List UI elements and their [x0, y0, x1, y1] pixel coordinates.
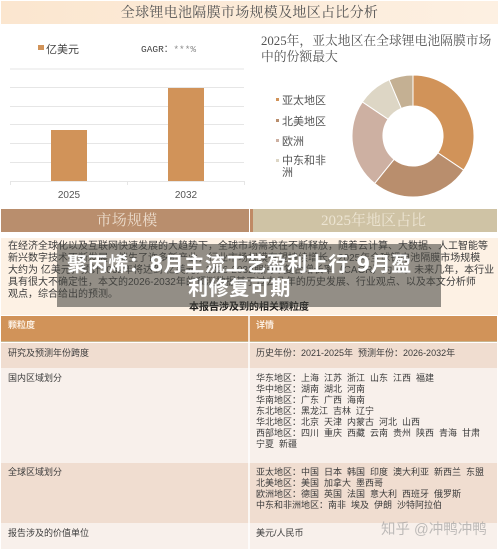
row: domestic regions: 华中地区：湖南 湖北 河南	[256, 384, 365, 394]
table header: 详情	[256, 320, 274, 330]
donut legend: 北美地区	[282, 116, 326, 128]
donut legend: 中东和非	[282, 155, 326, 167]
table header: 颗粒度	[8, 320, 35, 330]
donut legend: 洲	[282, 167, 293, 179]
row: global regions	[1, 463, 497, 523]
row: global regions: 亚太地区：中国 日本 韩国 印度 澳大利亚 新西兰 东盟	[256, 467, 484, 477]
bar chart: market size: 亿美元	[46, 43, 79, 56]
market size paragraph: 具有很大不确定性，本文的2026-2032年的预测数据基于过去几年的历史发展、行业观点、以及本文分析师	[8, 277, 476, 288]
table header	[1, 316, 497, 342]
donut heading: 2025年，亚太地区在全球锂电池隔膜市场	[261, 34, 491, 48]
bar chart: market size	[10, 43, 245, 201]
row: domestic regions: 华北地区：北京 天津 内蒙古 河北 山西	[256, 417, 420, 427]
news headline overlay: 聚丙烯：8月主流工艺盈利上行 9月盈	[67, 252, 412, 276]
watermark: 知乎 @冲鸭冲鸭	[381, 522, 487, 538]
news headline overlay: 利修复可期	[188, 276, 291, 300]
donut heading	[261, 34, 491, 64]
section header: market size: 市场规模	[96, 213, 158, 229]
row: domestic regions: 华东地区：上海 江苏 浙江 山东 江西 福建	[256, 373, 434, 383]
row: global regions: 全球区域划分	[8, 467, 62, 477]
bar chart: market size: GAGR：***%	[141, 44, 196, 55]
section header: 2025 regional share	[250, 209, 497, 232]
section header: market size	[1, 209, 253, 232]
section header: 2025 regional share: 2025年地区占比	[321, 213, 426, 229]
donut legend	[276, 94, 326, 179]
market size paragraph: 大约为 亿美元，预计2032年将达到 亿美元，2026-2032期间年复合增长率（CAGR）为 %。未来几年，本行业	[8, 265, 494, 276]
donut chart: regional share	[352, 76, 474, 196]
bar chart: market size: 2025	[58, 190, 81, 201]
donut legend: 亚太地区	[282, 95, 326, 107]
row: global regions: 欧洲地区：德国 英国 法国 意大利 西班牙 俄罗斯	[256, 489, 461, 499]
row: domestic regions: 国内区域划分	[8, 373, 62, 383]
row: domestic regions: 华南地区：广东 广西 海南	[256, 395, 365, 405]
row: value unit	[1, 523, 497, 549]
market size paragraph: 新兴数字技术不断发展，催生了许多新产业，行业市场规模有望持续增长。2025年全球锂电池隔膜市场规模	[8, 253, 480, 264]
market size paragraph: 在经济全球化以及互联网快速发展的大趋势下，全球市场需求在不断释放，随着云计算、大数据、人工智能等	[8, 241, 488, 252]
row: value unit: 美元/人民币	[256, 528, 304, 538]
news headline overlay	[57, 244, 441, 307]
table column divider	[248, 316, 250, 549]
row: domestic regions: 宁夏 新疆	[256, 439, 297, 449]
row: domestic regions: 西部地区：四川 重庆 西藏 云南 贵州 陕西 青海 甘肃	[256, 428, 480, 438]
row: value unit: 报告涉及的价值单位	[8, 528, 89, 538]
row: global regions: 中东和非洲地区：南非 埃及 伊朗 沙特阿拉伯	[256, 500, 442, 510]
table caption: 本报告涉及到的相关颗粒度	[189, 302, 309, 313]
title banner: 全球锂电池隔膜市场规模及地区占比分析	[121, 6, 378, 21]
row: year span: 历史年份：2021-2025年 预测年份：2026-2032年	[256, 348, 455, 358]
market size paragraph: 观点，综合给出的预测。	[8, 289, 118, 300]
row: year span: 研究及预测年份跨度	[8, 348, 89, 358]
donut heading: 中的份额最大	[261, 50, 338, 64]
title banner	[1, 1, 498, 24]
bar chart: market size: 2032	[175, 190, 198, 201]
market size paragraph	[1, 238, 498, 315]
row: year span	[1, 343, 497, 368]
donut legend: 欧洲	[282, 136, 304, 148]
row: domestic regions	[1, 368, 497, 463]
table	[1, 316, 497, 549]
row: domestic regions: 东北地区：黑龙江 吉林 辽宁	[256, 406, 374, 416]
row: global regions: 北美地区：美国 加拿大 墨西哥	[256, 478, 383, 488]
